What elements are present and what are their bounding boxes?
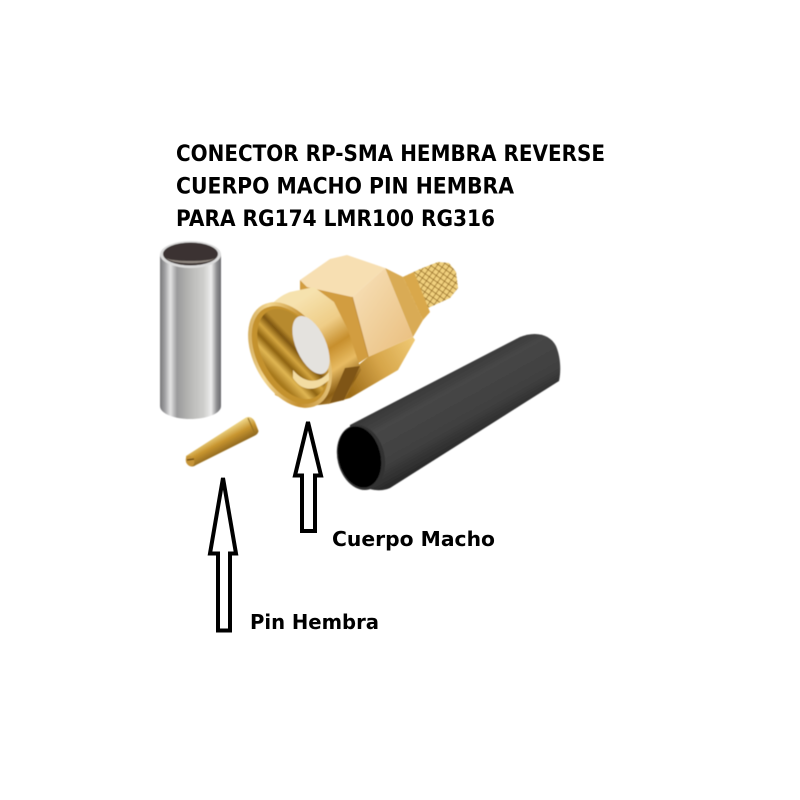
hex nut xyxy=(300,255,415,404)
icon: metal crimp sleeve xyxy=(160,241,221,419)
label: cuerpo macho: Cuerpo Macho xyxy=(332,527,495,551)
arrow: pin hembra xyxy=(210,478,236,630)
barrel collar xyxy=(268,287,361,407)
title: PARA RG174 LMR100 RG316 xyxy=(176,207,495,232)
knurled crimp tail xyxy=(385,262,458,337)
label: pin hembra: Pin Hembra xyxy=(250,610,379,634)
icon: gold connector body xyxy=(231,255,458,422)
title xyxy=(176,142,605,232)
arrow: cuerpo macho xyxy=(295,422,321,531)
title: CONECTOR RP-SMA HEMBRA REVERSE xyxy=(176,142,605,167)
front ring and thread xyxy=(231,288,349,422)
title: CUERPO MACHO PIN HEMBRA xyxy=(176,174,514,200)
icon: black heat-shrink tube xyxy=(330,334,560,495)
icon: gold pin xyxy=(184,417,258,468)
